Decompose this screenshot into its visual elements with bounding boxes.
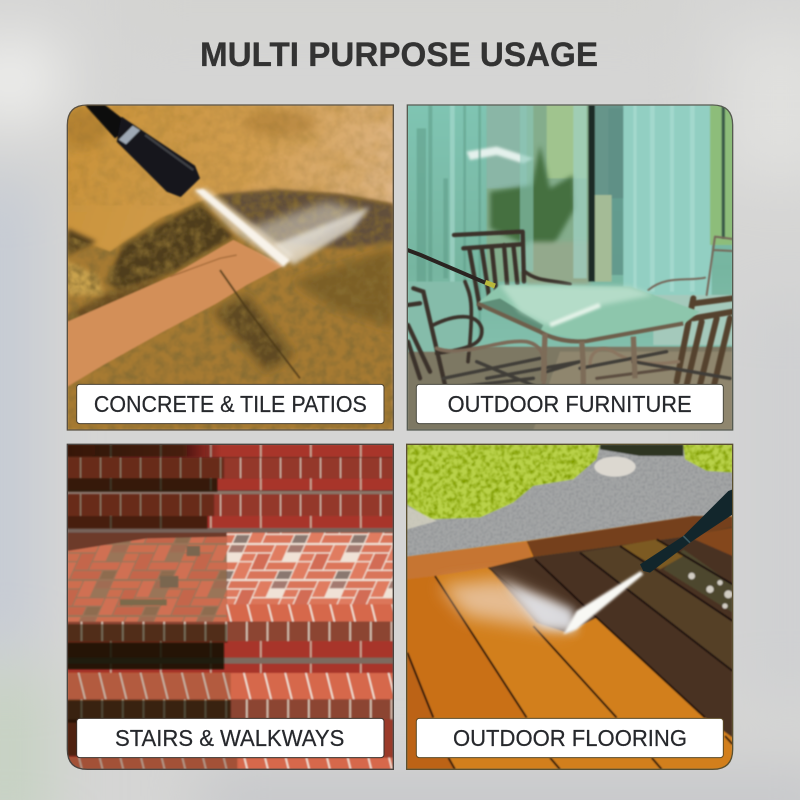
icon: nozzle <box>85 105 200 197</box>
clean strip <box>67 240 283 387</box>
table <box>477 285 700 385</box>
spray <box>440 571 643 634</box>
label box <box>77 384 384 424</box>
icon: nozzle <box>640 489 733 573</box>
photo: window and curtains <box>407 105 733 430</box>
label box: CONCRETE & TILE PATIOS <box>94 391 367 417</box>
panel: outdoor flooring <box>407 444 733 769</box>
photo: brick steps <box>67 444 393 769</box>
grime on left half <box>67 444 237 769</box>
panel: stairs and walkways <box>67 444 393 769</box>
spray <box>193 188 370 268</box>
panel: concrete and tile patios <box>60 105 393 430</box>
label box <box>416 384 723 424</box>
title: MULTI PURPOSE USAGE <box>200 36 598 74</box>
photo: patio surface <box>60 105 393 430</box>
label box <box>416 718 723 758</box>
panel: outdoor furniture <box>407 105 733 430</box>
chairs <box>408 232 733 388</box>
label box <box>77 718 384 758</box>
label box: OUTDOOR FLOORING <box>453 725 687 751</box>
label box: STAIRS & WALKWAYS <box>115 725 344 751</box>
wand <box>407 250 495 286</box>
photo: garden and gravel <box>407 444 733 559</box>
deck boards <box>407 516 733 769</box>
label box: OUTDOOR FURNITURE <box>448 391 692 417</box>
